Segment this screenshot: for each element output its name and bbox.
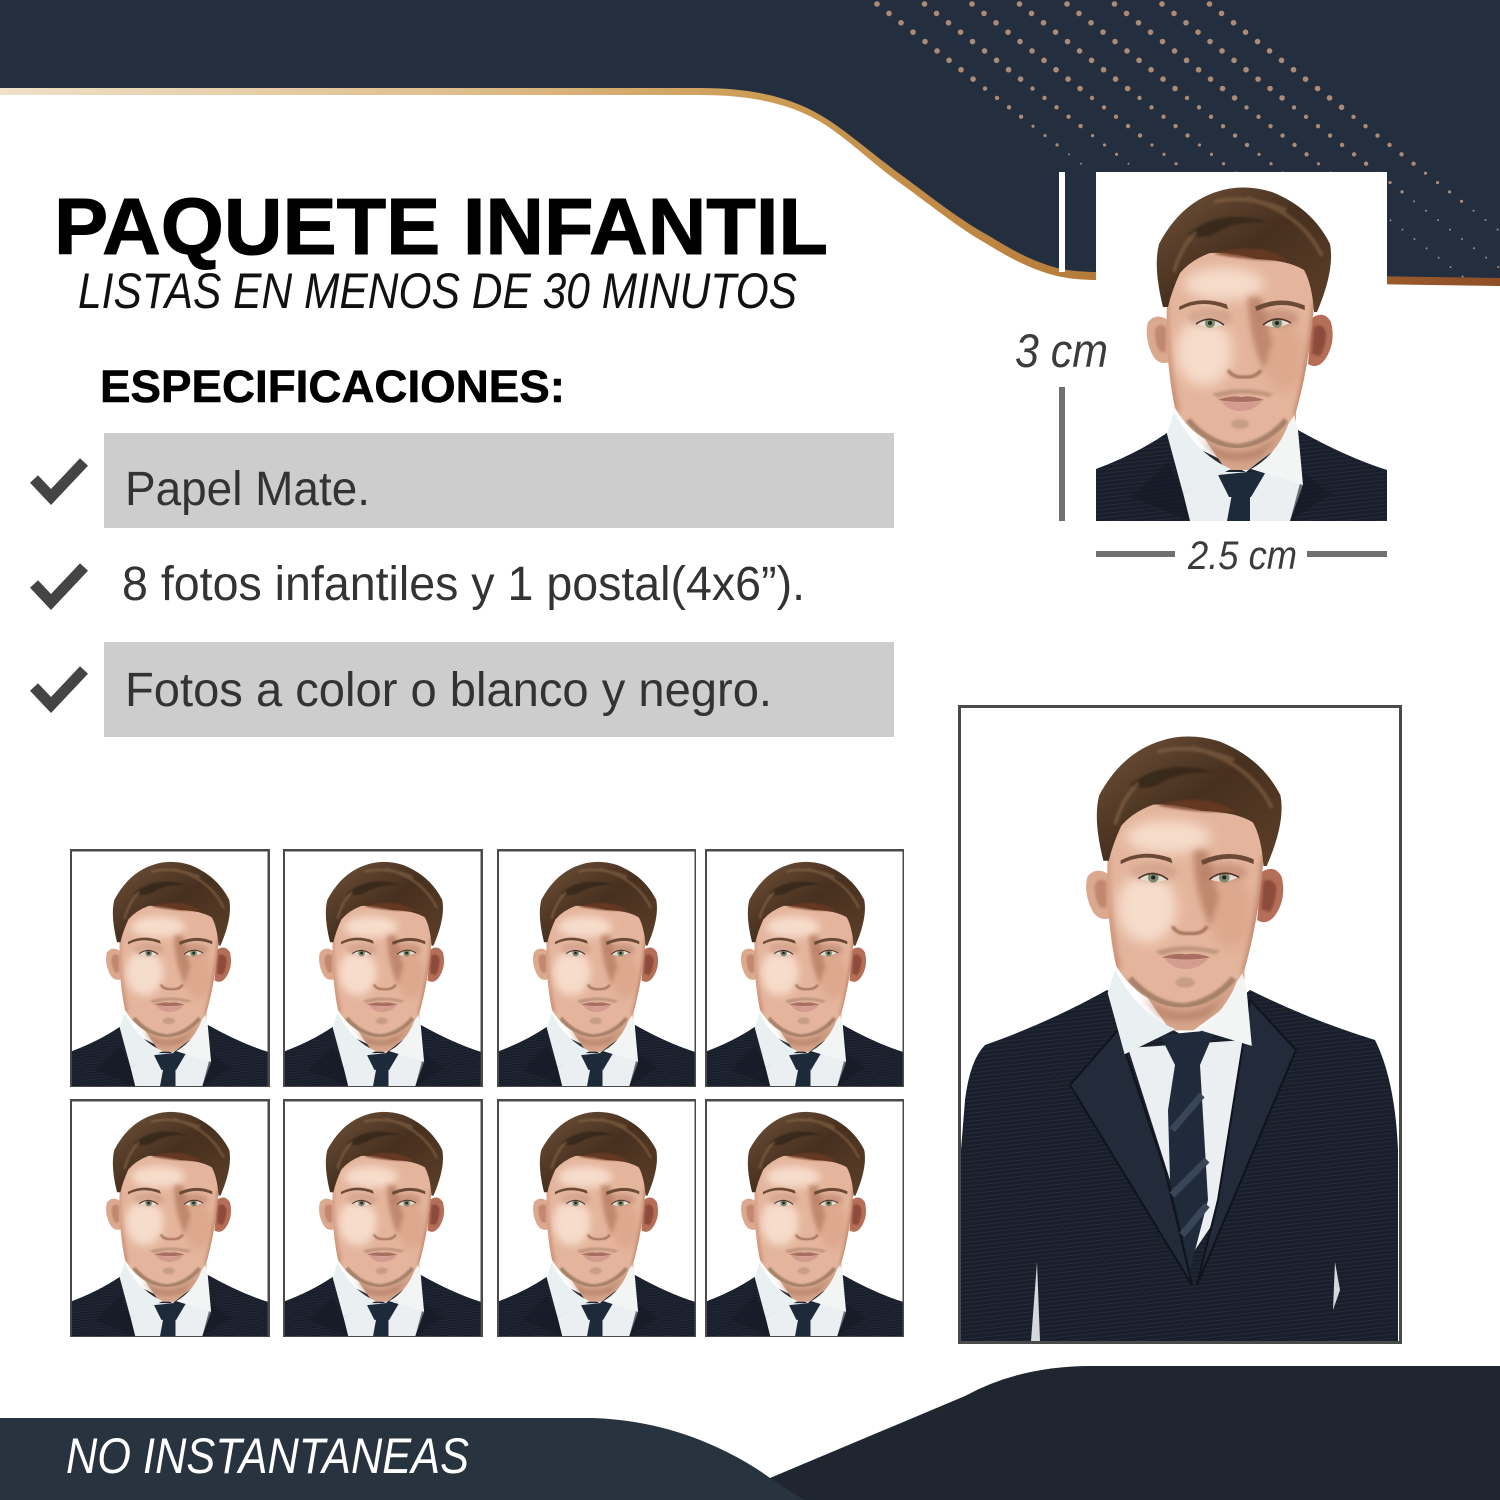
white vertical tick [1059, 172, 1065, 272]
subtitle: LISTAS EN MENOS DE 30 MINUTOS [78, 263, 797, 319]
thumbnail 8 [706, 1100, 903, 1336]
title: PAQUETE INFANTIL [54, 182, 828, 271]
sized portrait [1096, 172, 1387, 521]
thumbnail 2 [284, 850, 482, 1086]
heading: especificaciones: ESPECIFICACIONES: [100, 361, 565, 412]
thumbnail grid: 8 photos [72, 850, 903, 1336]
footer text: NO INSTANTANEAS [66, 1428, 469, 1484]
bottom right dark shape [770, 1366, 1500, 1500]
thumbnail 5 [72, 1100, 268, 1336]
thumbnail 3 [498, 850, 695, 1086]
height label: 3 cm [1015, 324, 1108, 377]
spec row 1 [34, 433, 894, 528]
spec row 3 [34, 642, 894, 737]
postal portrait [960, 706, 1400, 1342]
dot pattern [877, 4, 1498, 277]
bottom left banner [0, 1418, 804, 1500]
width label: 2.5 cm [1187, 534, 1297, 578]
thumbnail 6 [284, 1100, 482, 1336]
spec row 1: Papel Mate. [125, 463, 370, 516]
width bars [1096, 551, 1387, 557]
thumbnail 1 [72, 850, 268, 1086]
spec row 2: 8 fotos infantiles y 1 postal(4x6”). [122, 558, 805, 611]
spec row 3: Fotos a color o blanco y negro. [125, 664, 772, 717]
thumbnail 4 [706, 850, 903, 1086]
thumbnail 7 [498, 1100, 695, 1336]
height bar [1059, 387, 1065, 521]
photo with dimensions [1015, 172, 1387, 578]
top banner with gold curve [0, 0, 1500, 286]
